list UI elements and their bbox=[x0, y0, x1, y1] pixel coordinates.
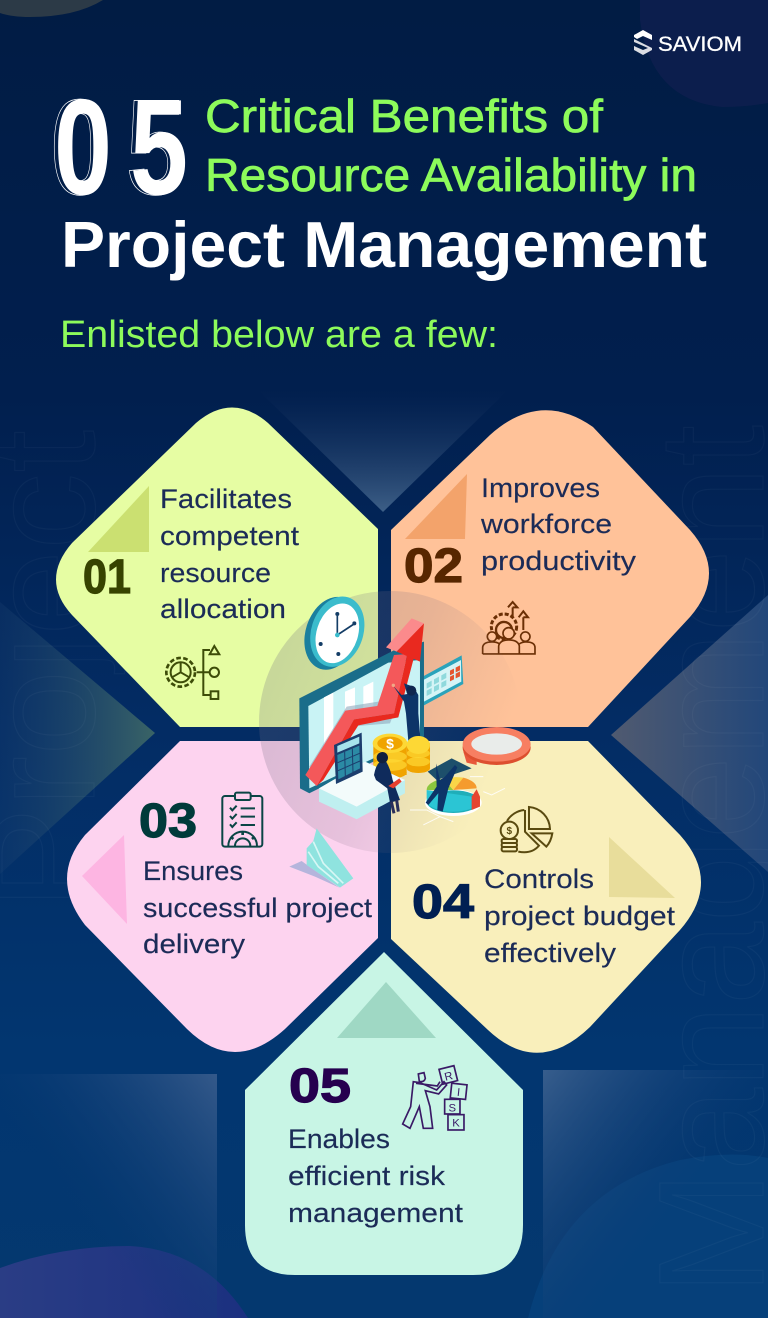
number 05: 05 bbox=[289, 1060, 351, 1113]
title line 3: Project Management bbox=[61, 208, 707, 281]
text 03 bbox=[143, 856, 373, 959]
icon: man stacking risk blocks: I bbox=[456, 1087, 461, 1099]
text 05 bbox=[288, 1124, 464, 1228]
text 04: effectively bbox=[484, 938, 617, 968]
logo wordmark: SAVIOM bbox=[658, 33, 742, 56]
accent triangle 02 bbox=[405, 474, 467, 539]
title numeral 05: 0 bbox=[50, 71, 110, 223]
logo: Saviom bbox=[634, 30, 742, 56]
panel shape 02 bbox=[391, 410, 709, 727]
decorative triangle top centre bbox=[258, 390, 508, 512]
accent triangle 03 bbox=[82, 835, 127, 924]
text 01 bbox=[160, 484, 300, 624]
title numeral 05: 5 bbox=[130, 71, 188, 223]
number 04: 04 bbox=[412, 876, 474, 929]
panel: 04 project budget bbox=[391, 741, 701, 1053]
text 02: workforce bbox=[480, 509, 612, 539]
panel: 01 resource allocation bbox=[56, 408, 378, 727]
icon: clipboard checklist bbox=[222, 793, 262, 847]
decorative circle bottom right bbox=[528, 1154, 768, 1318]
title numeral 05 bbox=[50, 71, 188, 223]
text 05: Enables bbox=[288, 1124, 390, 1154]
icon: budget pie and coins bbox=[501, 807, 552, 852]
panel: 03 project delivery bbox=[67, 741, 378, 1052]
central illustration halo bbox=[259, 591, 521, 853]
circuit lines bbox=[410, 777, 505, 825]
text 02: Improves bbox=[481, 473, 600, 503]
text 01: Facilitates bbox=[160, 484, 292, 514]
panel shape 03 bbox=[67, 741, 378, 1052]
panel shape 01 bbox=[56, 408, 378, 727]
title numeral 05: 5 bbox=[126, 71, 186, 223]
text 04: Controls bbox=[484, 864, 594, 894]
text 05: management bbox=[288, 1198, 464, 1228]
text 01: competent bbox=[160, 521, 300, 551]
monitor bbox=[299, 642, 424, 793]
icon: gear hierarchy bbox=[166, 646, 219, 699]
calendar bbox=[423, 655, 463, 705]
number 03: 03 bbox=[139, 795, 197, 848]
text 03: successful project bbox=[143, 893, 373, 923]
magnifying glass bbox=[428, 727, 531, 780]
panel: 05 risk management bbox=[245, 952, 523, 1275]
decorative corner circle top left bbox=[0, 0, 103, 17]
standing man bbox=[392, 683, 421, 745]
title numeral 05: 0 bbox=[54, 71, 112, 223]
decorative triangle left bbox=[0, 602, 155, 874]
accent triangle 05 bbox=[337, 982, 436, 1038]
decorative triangle right bbox=[611, 595, 768, 872]
coin stacks: $ bbox=[386, 735, 394, 751]
icon: teal rock fragment bbox=[289, 828, 353, 888]
icon: man stacking risk blocks: S bbox=[449, 1102, 457, 1114]
title line 2: Resource Availability in bbox=[205, 149, 697, 201]
panel shape 05 bbox=[245, 952, 523, 1275]
calculator bbox=[334, 733, 363, 784]
decorative circle bottom left bbox=[0, 1246, 248, 1318]
number 01: 01 bbox=[83, 551, 131, 604]
decorative corner circle top right bbox=[640, 0, 768, 107]
seated woman bbox=[374, 752, 402, 813]
coin stacks bbox=[373, 734, 430, 779]
text 01: resource bbox=[160, 558, 271, 588]
decorative block bottom left bbox=[0, 1074, 217, 1318]
icon: team with gear and arrows bbox=[483, 602, 535, 654]
accent triangle 04 bbox=[609, 837, 675, 898]
accent triangle 01 bbox=[88, 486, 149, 552]
icon: budget pie and coins: $ bbox=[507, 826, 513, 837]
panel: 02 workforce productivity bbox=[391, 410, 709, 727]
text 01: allocation bbox=[160, 594, 286, 624]
seated man on pie bbox=[426, 763, 457, 812]
text 02 bbox=[480, 473, 637, 576]
icon: Saviom S mark bbox=[634, 30, 652, 55]
text 05: efficient risk bbox=[288, 1161, 446, 1191]
stack of papers bbox=[319, 762, 405, 819]
icon: man stacking risk blocks bbox=[403, 1066, 467, 1130]
text 03: delivery bbox=[143, 929, 246, 959]
title line 1: Critical Benefits of bbox=[205, 90, 603, 142]
red growth arrow bbox=[305, 618, 424, 786]
icon: man stacking risk blocks: K bbox=[452, 1118, 460, 1130]
text 04 bbox=[484, 864, 676, 968]
title bbox=[50, 71, 707, 281]
icon: central growth illustration bbox=[295, 589, 531, 825]
icon: man stacking risk blocks: R bbox=[443, 1070, 454, 1084]
clock bbox=[295, 589, 373, 677]
text 04: project budget bbox=[484, 901, 676, 931]
decorative block bottom right bbox=[543, 1070, 768, 1318]
text 02: productivity bbox=[481, 546, 637, 576]
number 02: 02 bbox=[404, 540, 463, 593]
panel shape 04 bbox=[391, 741, 701, 1053]
pie chart bbox=[425, 777, 482, 816]
text 03: Ensures bbox=[143, 856, 243, 886]
subheading: Enlisted below are a few: bbox=[60, 314, 498, 356]
